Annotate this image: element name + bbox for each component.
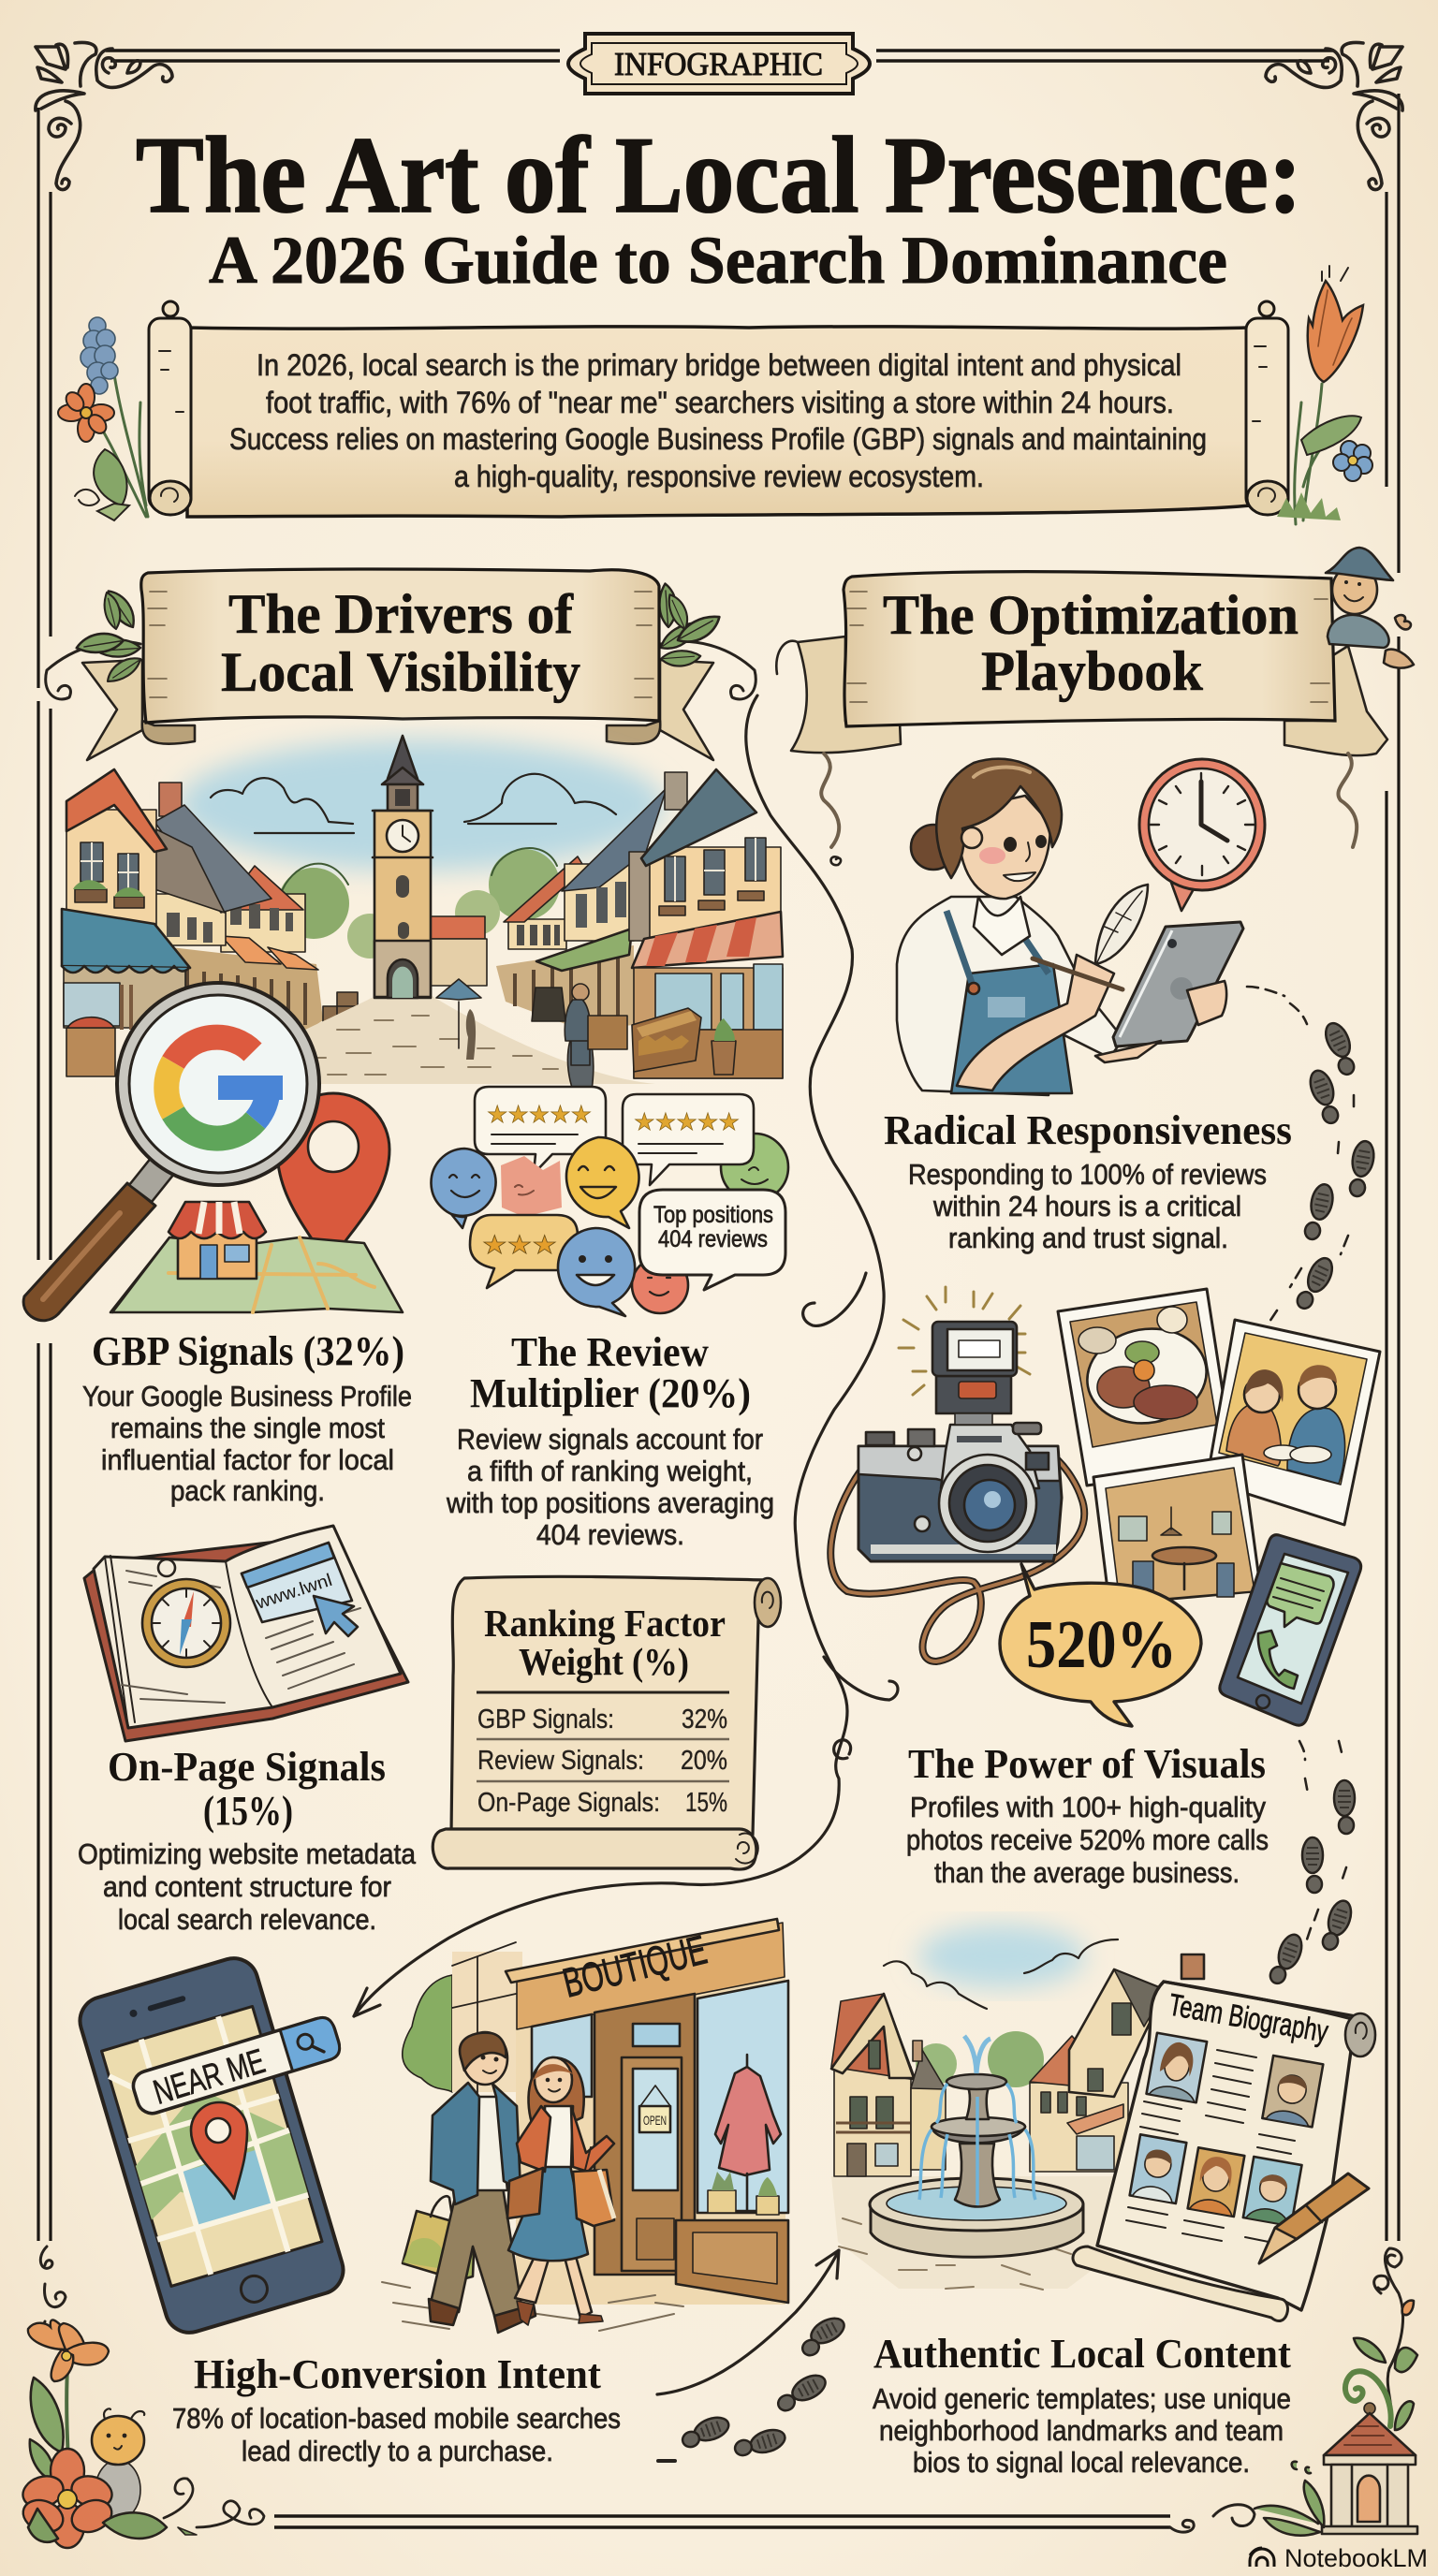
text: Authentic Local Content: Avoid generic templates; use unique xyxy=(873,2382,1291,2415)
tails and ribbons xyxy=(776,637,1387,865)
ornament: top-right corner xyxy=(1266,43,1402,190)
text: The Power of Visuals: Profiles with 100+ high-quality xyxy=(910,1791,1266,1823)
icon: team biography scroll xyxy=(1073,1982,1375,2321)
badge: INFOGRAPHIC xyxy=(568,34,870,94)
five star bubble left xyxy=(475,1087,606,1174)
right buildings xyxy=(436,769,783,1090)
text: The Power of Visuals xyxy=(906,1741,1269,1889)
body shirt xyxy=(897,897,1123,1095)
left buildings xyxy=(62,769,318,1076)
star bubble yellow xyxy=(470,1215,578,1288)
text: Radical Responsiveness: ranking and trust signal. xyxy=(948,1222,1228,1254)
text: Radical Responsiveness: within 24 hours is a critical xyxy=(932,1190,1241,1222)
title: A 2026 Guide to Search Dominance xyxy=(209,223,1227,298)
icon: magnifying glass with Google G xyxy=(23,983,319,1321)
icon: location pin xyxy=(277,1093,389,1266)
table title: Ranking Factor xyxy=(484,1602,726,1645)
badge: INFOGRAPHIC: INFOGRAPHIC xyxy=(614,46,823,82)
right houses xyxy=(1030,1954,1204,2172)
tails and curls xyxy=(46,641,756,760)
illustration: shop owner with tablet xyxy=(897,759,1243,1095)
decoration: bottom-right vine and gazebo xyxy=(1170,2248,1417,2536)
table title: Weight (%) xyxy=(519,1640,689,1683)
text: Authentic Local Content: Authentic Local Content xyxy=(873,2331,1291,2377)
table rows xyxy=(477,1705,727,1818)
face: coral xyxy=(501,1156,562,1217)
text: Radical Responsiveness: Radical Responsiveness xyxy=(884,1107,1292,1153)
clock tower xyxy=(373,736,487,998)
store sign: BOUTIQUE xyxy=(559,1926,712,2007)
banner: The Optimization Playbook: The Optimization xyxy=(883,584,1299,646)
callout: top positions 404 reviews xyxy=(639,1190,785,1290)
face: blue xyxy=(431,1149,496,1228)
shopping bag left xyxy=(403,2211,468,2280)
text: Authentic Local Content: neighborhood landmarks and team xyxy=(879,2414,1284,2447)
text: On-Page Signals xyxy=(78,1744,417,1936)
title: The Art of Local Presence: xyxy=(136,115,1302,236)
star bubble yellow: ★★★ xyxy=(482,1231,557,1260)
store sign xyxy=(506,1919,785,2029)
icon: small shop xyxy=(169,1202,266,1279)
callout: top positions 404 reviews: Top positions xyxy=(653,1202,773,1228)
icon: footprints trail lower right xyxy=(1268,1741,1355,1985)
Google G mark xyxy=(167,1037,268,1138)
map pin on phone xyxy=(191,2102,247,2199)
icon: clock speech bubble xyxy=(1139,759,1265,911)
title xyxy=(136,115,1302,298)
text: High-Conversion Intent: High-Conversion Intent xyxy=(194,2351,601,2397)
intro text xyxy=(229,348,1207,493)
forearm and hands xyxy=(957,955,1114,1090)
text: Authentic Local Content xyxy=(873,2331,1291,2479)
woman xyxy=(515,2247,592,2318)
illustration: fountain town square xyxy=(831,1925,1204,2290)
feather xyxy=(1095,885,1148,964)
icon: smartphone near me search xyxy=(74,1953,349,2338)
text: High-Conversion Intent: 78% of location-based mobile searches xyxy=(172,2402,621,2435)
icon: footprints trail upper right xyxy=(1247,987,1376,1322)
pavement lines xyxy=(382,2282,683,2331)
door and windows xyxy=(532,1981,788,2303)
text: The Review Multiplier: The Review xyxy=(511,1329,709,1375)
text: High-Conversion Intent: lead directly to a purchase. xyxy=(242,2435,553,2467)
text: The Review Multiplier: with top positions averaging xyxy=(446,1486,774,1519)
intro text: foot traffic, with 76% of "near me" searchers visiting a store within 24 hours. xyxy=(266,386,1174,419)
camera body xyxy=(858,1446,1062,1561)
text: GBP Signals: influential factor for local xyxy=(101,1443,394,1476)
text: Authentic Local Content: bios to signal local relevance. xyxy=(913,2446,1250,2479)
icon: open book with compass: www.lwnl xyxy=(253,1571,334,1614)
text: The Review Multiplier xyxy=(446,1329,774,1551)
leaves xyxy=(77,583,723,682)
arcades and street fronts xyxy=(154,945,634,1048)
open sign: OPEN xyxy=(643,2113,667,2128)
text: On-Page Signals: local search relevance. xyxy=(118,1903,376,1936)
table rows: GBP Signals: xyxy=(477,1705,614,1734)
text: GBP Signals: Your Google Business Profile xyxy=(82,1380,412,1412)
illustration: village street scene xyxy=(62,736,783,1090)
open sign xyxy=(639,2086,670,2132)
store wall xyxy=(516,1975,785,2305)
flash unit xyxy=(936,1376,1011,1413)
intro text: Success relies on mastering Google Business Profile (GBP) signals and maintaining xyxy=(229,422,1207,456)
face: coral small xyxy=(632,1257,688,1313)
icon: little man with hat xyxy=(1326,548,1414,668)
camera strap xyxy=(830,1460,1084,1661)
decoration: bottom-left flowers and bee xyxy=(19,2247,264,2548)
text: GBP Signals: GBP Signals (32%) xyxy=(92,1328,404,1374)
banner: The Optimization Playbook: Playbook xyxy=(981,640,1204,702)
table rows: 15% xyxy=(685,1788,727,1818)
text: The Power of Visuals: photos receive 520% more calls xyxy=(906,1823,1269,1856)
table title xyxy=(484,1602,726,1683)
curve: winding divider arrow xyxy=(354,695,898,2016)
callout: 520 percent bubble xyxy=(1000,1564,1201,1726)
text: The Review Multiplier: Multiplier (20%) xyxy=(470,1370,751,1416)
text: GBP Signals: pack ranking. xyxy=(170,1474,325,1507)
icon: team biography scroll: Team Biography xyxy=(1167,1986,1331,2049)
text: Radical Responsiveness: Responding to 100% of reviews xyxy=(908,1158,1267,1191)
street xyxy=(187,994,655,1084)
tablet xyxy=(1113,922,1243,1046)
photo: cafe interior xyxy=(1093,1455,1258,1604)
table rows: On-Page Signals: xyxy=(477,1788,660,1818)
banner: The Drivers of Local Visibility: The Drivers of xyxy=(228,583,574,645)
search bar NEAR ME: NEAR ME xyxy=(149,2042,270,2112)
text: The Review Multiplier: a fifth of ranking weight, xyxy=(467,1455,753,1487)
ground xyxy=(831,2176,1123,2289)
far trees xyxy=(278,848,560,959)
banner: The Drivers of Local Visibility: Local Visibility xyxy=(221,641,580,703)
table rows: 32% xyxy=(682,1705,727,1734)
icon: smartphone with call bubble xyxy=(1220,1535,1361,1725)
table rows: 20% xyxy=(681,1746,727,1776)
icon: right flowers beside scroll xyxy=(1277,266,1372,524)
callout: 520 percent bubble: 520% xyxy=(1026,1606,1177,1682)
flash rays xyxy=(899,1287,1030,1395)
text: GBP Signals xyxy=(82,1328,412,1507)
five star bubble right xyxy=(623,1094,788,1201)
text: The Review Multiplier: 404 reviews. xyxy=(536,1518,684,1551)
face: blue large xyxy=(558,1228,635,1316)
search bar NEAR ME xyxy=(129,2014,343,2117)
text: High-Conversion Intent xyxy=(172,2351,621,2467)
text: On-Page Signals: Optimizing website metadata xyxy=(78,1837,417,1870)
left timber house xyxy=(831,1994,946,2176)
arrow: bottom curve to fountain xyxy=(657,2250,839,2394)
intro text: In 2026, local search is the primary bridge between digital intent and physical xyxy=(257,348,1181,382)
photo: plated food xyxy=(1058,1289,1234,1486)
hair bun xyxy=(911,825,956,870)
illustration: boutique storefront xyxy=(382,1919,788,2333)
shopping couple xyxy=(403,2032,614,2333)
text: The Power of Visuals: The Power of Visuals xyxy=(908,1741,1266,1787)
icon: photo prints xyxy=(1058,1289,1380,1604)
sky xyxy=(178,739,665,871)
man xyxy=(431,2181,522,2321)
text: On-Page Signals: (15%) xyxy=(203,1788,293,1834)
banner: The Drivers of Local Visibility xyxy=(46,569,756,760)
icon: left flowers beside scroll xyxy=(58,317,148,520)
icon: pen xyxy=(1259,2174,1369,2263)
photo: happy couple xyxy=(1207,1320,1380,1525)
text: Radical Responsiveness xyxy=(884,1107,1292,1254)
five star bubble right: ★★★★★ xyxy=(634,1108,740,1135)
street tree xyxy=(403,1975,452,2092)
table rows: Review Signals: xyxy=(477,1746,644,1776)
intro text: a high-quality, responsive review ecosystem. xyxy=(454,460,984,493)
callout: top positions 404 reviews: 404 reviews xyxy=(658,1226,768,1252)
icon: open book with compass xyxy=(84,1526,408,1741)
banner: The Optimization Playbook xyxy=(776,548,1414,865)
panel: intro scroll xyxy=(149,301,1288,517)
text: The Review Multiplier: Review signals account for xyxy=(457,1423,763,1456)
icon: camera with flash xyxy=(830,1287,1084,1661)
text: GBP Signals: remains the single most xyxy=(110,1412,385,1444)
portraits xyxy=(1130,2033,1323,2226)
ornament: top-left corner xyxy=(36,43,172,190)
text: On-Page Signals: and content structure for xyxy=(103,1870,391,1903)
apron xyxy=(951,964,1072,1093)
logo: NotebookLM: NotebookLM xyxy=(1284,2544,1428,2572)
icon: review speech bubbles xyxy=(431,1087,788,1316)
fountain xyxy=(870,2036,1083,2257)
icon: folded map with shop xyxy=(110,1202,403,1312)
text: The Power of Visuals: than the average business. xyxy=(934,1856,1240,1889)
icon: footprints trail bottom xyxy=(658,2313,848,2461)
five star bubble left: ★★★★★ xyxy=(487,1101,592,1128)
dress mannequin xyxy=(708,2055,781,2215)
trees xyxy=(988,2031,1044,2087)
text: On-Page Signals: On-Page Signals xyxy=(108,1744,386,1790)
table scroll: ranking factor weight xyxy=(433,1576,781,1869)
face and hair xyxy=(959,796,1050,899)
face: yellow xyxy=(566,1137,638,1228)
